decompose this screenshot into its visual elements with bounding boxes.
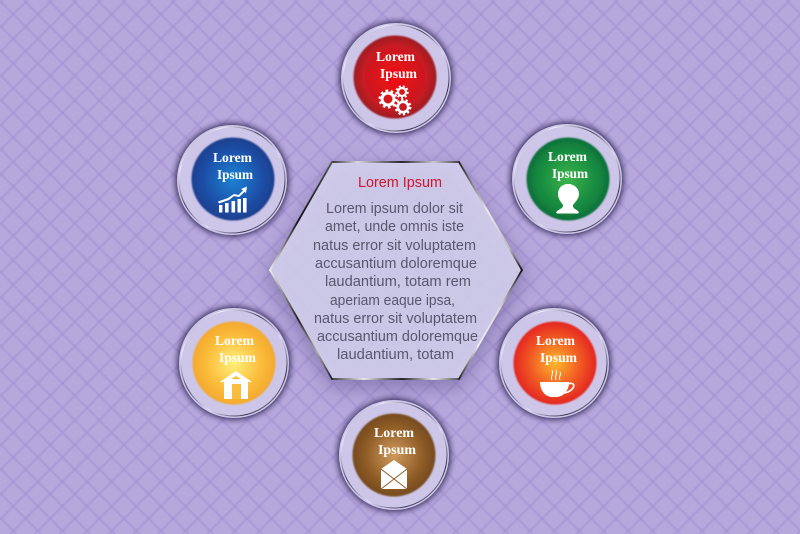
label: Lorem	[374, 425, 415, 440]
label: Lorem	[548, 149, 588, 164]
hexagon body text: natus error sit voluptatem	[313, 237, 476, 254]
label: Ipsum	[540, 350, 578, 365]
label	[536, 333, 578, 365]
hexagon body text: laudantium, totam	[337, 346, 454, 363]
label: Lorem	[215, 333, 255, 348]
label	[215, 333, 257, 365]
label	[213, 150, 254, 182]
badge: yellow, lower left	[177, 306, 291, 420]
label	[374, 425, 417, 457]
label	[376, 49, 418, 81]
label: Lorem	[376, 49, 416, 64]
label: Lorem	[213, 150, 253, 165]
label: Ipsum	[217, 167, 254, 182]
label: Ipsum	[219, 350, 257, 365]
icon: gears	[380, 86, 410, 114]
hexagon body text: aperiam eaque ipsa,	[330, 292, 455, 309]
icon: rising bar chart	[218, 186, 247, 212]
hexagon body text: natus error sit voluptatem	[314, 310, 477, 327]
hexagon body text	[313, 200, 478, 363]
hexagon body text: amet, unde omnis iste	[325, 218, 464, 235]
label: Lorem	[536, 333, 576, 348]
icon: steaming cup	[540, 370, 574, 397]
label: Ipsum	[378, 442, 417, 457]
hexagon heading: Lorem Ipsum	[358, 174, 442, 191]
badge: blue, upper left	[175, 123, 289, 237]
badge: green, upper right	[510, 122, 624, 236]
icon: house	[220, 371, 252, 399]
hexagon body text: laudantium, totam rem	[325, 273, 471, 290]
hexagon body text: accusantium doloremque	[317, 328, 478, 345]
icon: open envelope	[381, 460, 407, 489]
icon: person bust	[556, 184, 579, 214]
badge: brown, bottom	[337, 398, 451, 512]
hexagon body text: Lorem ipsum dolor sit	[326, 200, 464, 217]
label	[548, 149, 589, 181]
hexagon body text: accusantium doloremque	[315, 255, 477, 272]
label: Ipsum	[552, 166, 589, 181]
badge: orange, lower right	[497, 306, 611, 420]
panel: central hexagon	[266, 162, 526, 388]
label: Ipsum	[380, 66, 418, 81]
badge: red, top	[339, 21, 453, 135]
